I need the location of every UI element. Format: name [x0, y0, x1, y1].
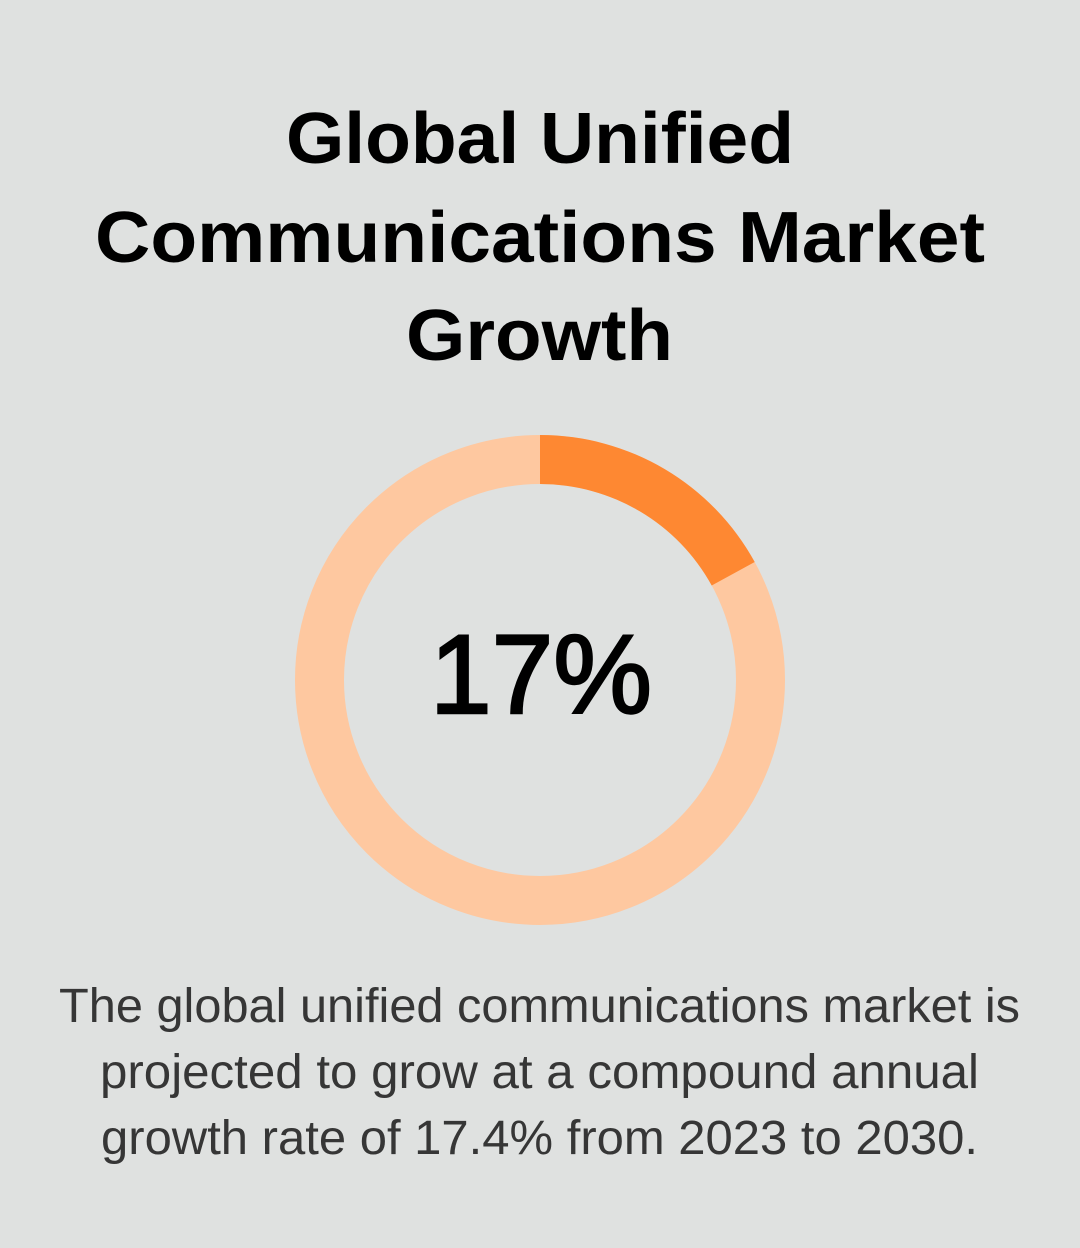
donut track — [320, 460, 760, 900]
description text: projected to grow at a compound annual — [100, 1046, 979, 1099]
donut value: 17% — [430, 612, 652, 737]
title: Growth — [406, 296, 673, 376]
title: Global Unified — [286, 99, 794, 179]
title — [95, 99, 985, 376]
description text: growth rate of 17.4% from 2023 to 2030. — [101, 1112, 978, 1165]
donut chart: 17% — [320, 435, 760, 900]
title: Communications Market — [95, 198, 985, 278]
donut highlighted segment — [540, 435, 755, 586]
description text: The global unified communications market is — [59, 980, 1020, 1033]
description text — [59, 980, 1020, 1165]
